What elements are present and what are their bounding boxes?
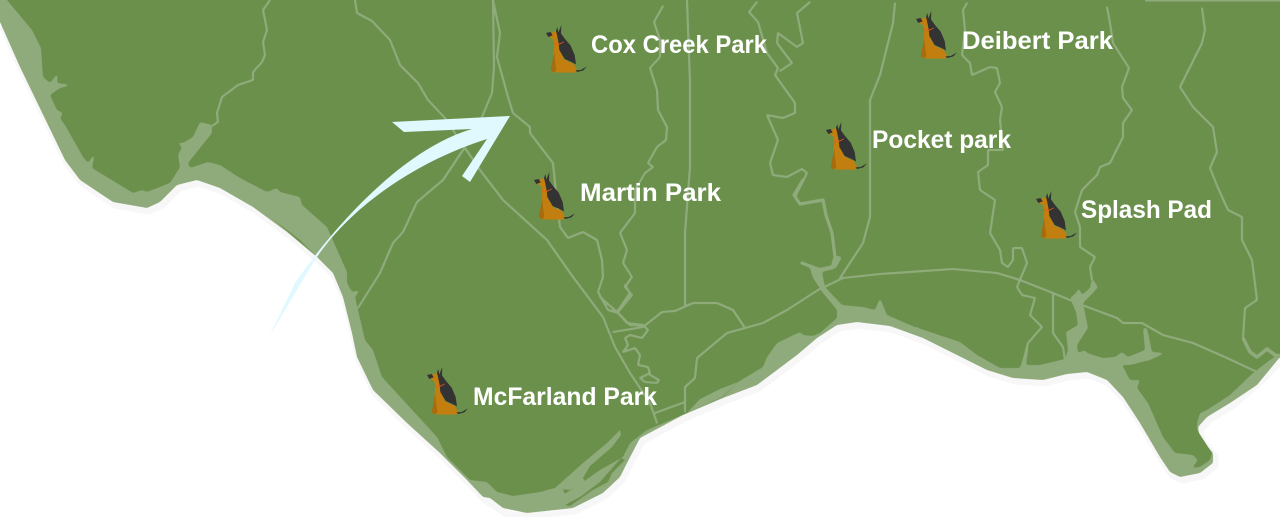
label: Pocket park: Pocket park xyxy=(872,126,1011,154)
marker: Deibert Park xyxy=(916,11,1113,59)
tidal channels xyxy=(555,430,621,490)
arrow pointing to the park area xyxy=(269,116,510,337)
marker: Cox Creek Park xyxy=(546,25,767,73)
label: Splash Pad: Splash Pad xyxy=(1081,196,1212,224)
label: Martin Park: Martin Park xyxy=(580,179,721,207)
label: Cox Creek Park: Cox Creek Park xyxy=(591,31,767,59)
icon: dog xyxy=(1036,191,1077,239)
icon: dog xyxy=(916,11,957,59)
icon: dog xyxy=(546,25,587,73)
marker: Splash Pad xyxy=(1036,191,1212,239)
marker: Pocket park xyxy=(826,122,1011,170)
label: Deibert Park: Deibert Park xyxy=(962,27,1113,55)
icon: dog xyxy=(826,122,867,170)
wide creek mouth xyxy=(794,180,835,270)
marker: McFarland Park xyxy=(427,367,657,415)
label: McFarland Park: McFarland Park xyxy=(473,383,657,411)
icon: dog xyxy=(534,172,575,220)
roads and streams xyxy=(212,0,1257,423)
top edge line xyxy=(1145,0,1280,2)
east creek mouth xyxy=(1243,338,1280,357)
marker: Martin Park xyxy=(534,172,721,220)
icon: dog xyxy=(427,367,468,415)
